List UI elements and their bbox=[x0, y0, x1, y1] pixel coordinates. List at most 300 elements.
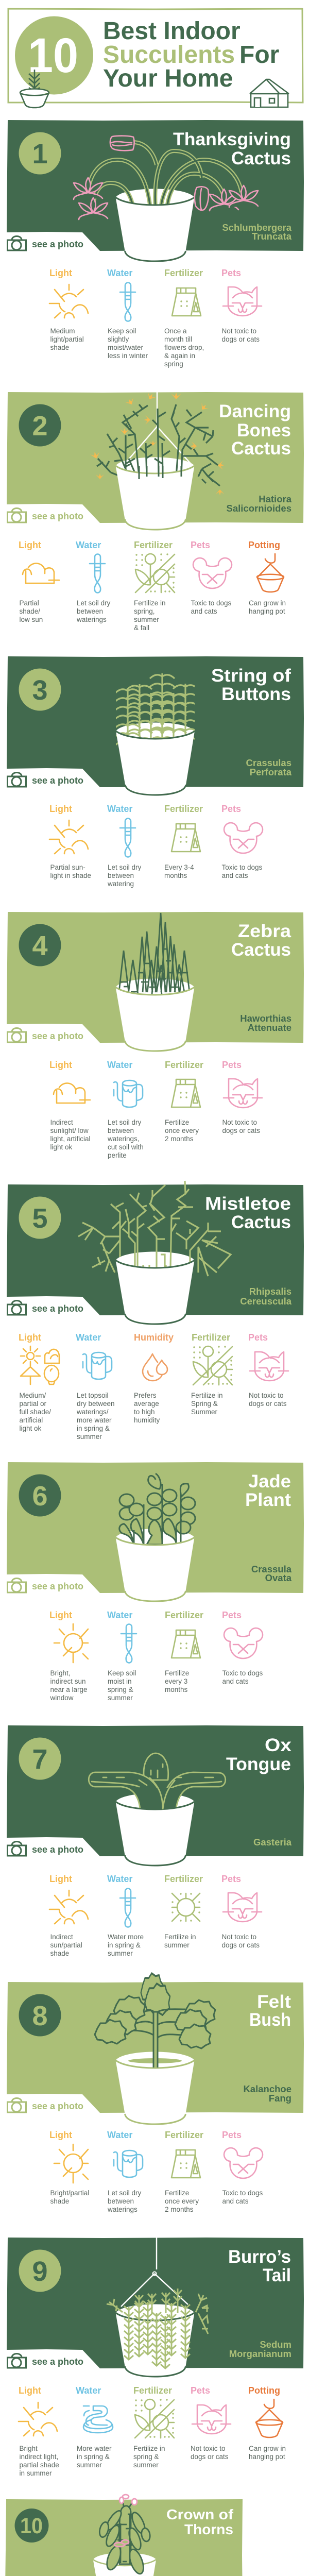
care: fertilizer: Fertilizer bbox=[133, 2385, 172, 2396]
section 7: Ox Tongue bbox=[7, 1725, 304, 1957]
number badge: 1 bbox=[32, 139, 48, 170]
care: light: near a large bbox=[50, 1686, 88, 1693]
title: For bbox=[239, 41, 279, 69]
pot and plant illustration bbox=[95, 1973, 215, 2124]
plant name: Thanksgiving bbox=[173, 129, 291, 149]
section 10: Crown of Thorns bbox=[5, 2495, 243, 2576]
botanical name: Ovata bbox=[265, 1572, 292, 1583]
care: light: sun/partial bbox=[50, 1941, 82, 1949]
see a photo button: see a photo bbox=[32, 239, 83, 249]
see a photo button: see a photo bbox=[32, 511, 83, 521]
care: light bbox=[49, 1060, 91, 1151]
care: pets: Not toxic to bbox=[221, 1933, 256, 1941]
care: light: low sun bbox=[20, 616, 43, 623]
number badge: 5 bbox=[32, 1203, 48, 1234]
plant name: Bones bbox=[237, 420, 291, 440]
care: pets: Pets bbox=[191, 540, 210, 550]
see a photo button bbox=[7, 1300, 83, 1315]
care: fertilizer: Fertilizer bbox=[164, 1874, 203, 1884]
care: pets: Toxic to dogs bbox=[221, 863, 263, 871]
care: light bbox=[19, 1332, 59, 1432]
plant name: Plant bbox=[245, 1490, 291, 1510]
care: light: shade/ bbox=[20, 607, 40, 615]
icon: potted plant bbox=[20, 70, 49, 108]
panel bbox=[7, 1462, 304, 1593]
number badge bbox=[19, 404, 61, 446]
care: water bbox=[107, 2130, 143, 2213]
care: light: Partial sun- bbox=[50, 863, 85, 871]
care: potting: Potting bbox=[248, 540, 280, 550]
care: potting: hanging pot bbox=[249, 2453, 285, 2461]
care: humidity: Prefers bbox=[134, 1392, 157, 1399]
care: fertilizer: every 3 bbox=[165, 1677, 187, 1685]
section 9: Burro's Tail bbox=[7, 2238, 304, 2477]
see a photo button bbox=[7, 1028, 83, 1042]
care: light: Light bbox=[19, 2385, 41, 2396]
care: humidity: average bbox=[134, 1400, 159, 1408]
panel bbox=[7, 912, 304, 1043]
plant name: Ox bbox=[265, 1735, 292, 1755]
care: water: Water bbox=[107, 804, 132, 814]
number badge bbox=[19, 924, 61, 967]
care: fertilizer: Fertilizer bbox=[192, 1332, 230, 1343]
care: pets: Pets bbox=[222, 1610, 242, 1620]
panel bbox=[7, 1725, 304, 1856]
see a photo button: see a photo bbox=[32, 1303, 83, 1314]
care: pets bbox=[222, 1060, 262, 1134]
care: water: moist/water bbox=[108, 344, 144, 351]
care: fertilizer: Fertilizer bbox=[165, 2130, 203, 2140]
care: fertilizer: summer bbox=[134, 616, 159, 623]
care: water: watering bbox=[107, 880, 134, 888]
care: humidity bbox=[134, 1332, 174, 1424]
care: light: indirect light, bbox=[20, 2453, 58, 2461]
care: pets: Not toxic to bbox=[191, 2445, 226, 2452]
care: fertilizer: Fertilizer bbox=[164, 268, 203, 278]
care: water: Keep soil bbox=[108, 327, 136, 335]
care: light: Light bbox=[49, 804, 72, 814]
botanical name: Fang bbox=[269, 2093, 291, 2104]
care: pets: dogs or cats bbox=[221, 1941, 260, 1949]
care: water: waterings/ bbox=[76, 1408, 109, 1416]
care: light: shade bbox=[50, 344, 69, 351]
care: light: artificial bbox=[20, 1416, 43, 1424]
care: light bbox=[49, 1874, 88, 1957]
care: water: More water bbox=[77, 2445, 112, 2452]
plant name: Cactus bbox=[231, 1212, 291, 1232]
care: light: light in shade bbox=[50, 872, 91, 879]
care: fertilizer bbox=[165, 1610, 203, 1693]
care: light: full shade/ bbox=[20, 1408, 51, 1416]
care: fertilizer: Fertilize bbox=[165, 1669, 189, 1677]
care: pets bbox=[191, 540, 232, 615]
care: fertilizer: summer bbox=[133, 2461, 159, 2469]
care: fertilizer: once every bbox=[165, 2197, 199, 2205]
plant name: Felt bbox=[257, 1992, 291, 2012]
care: water bbox=[107, 804, 142, 888]
care: water: perlite bbox=[108, 1151, 127, 1159]
care: water: Water bbox=[107, 1610, 132, 1620]
care: potting: Can grow in bbox=[249, 599, 286, 607]
care: water: waterings, bbox=[107, 1135, 140, 1143]
botanical name: Crassula bbox=[251, 1564, 292, 1574]
number badge: 10 bbox=[20, 2514, 43, 2538]
number badge: 4 bbox=[32, 930, 48, 961]
care: fertilizer: Fertilizer bbox=[165, 1610, 203, 1620]
care: water: waterings bbox=[107, 2206, 138, 2213]
care: water bbox=[107, 1060, 144, 1159]
botanical name: Morganianum bbox=[229, 2348, 291, 2359]
number badge: 3 bbox=[32, 675, 48, 706]
number badge bbox=[14, 2509, 48, 2543]
number badge bbox=[19, 2249, 61, 2292]
care: potting: Potting bbox=[248, 2385, 280, 2396]
care: water: spring & bbox=[108, 1686, 133, 1693]
number badge: 8 bbox=[32, 2001, 48, 2031]
care: water: between bbox=[108, 872, 134, 879]
care: pets: Not toxic to bbox=[249, 1392, 284, 1399]
care: pets: and cats bbox=[222, 2197, 249, 2205]
care: water bbox=[76, 1332, 115, 1440]
header frame bbox=[8, 9, 303, 103]
care: potting bbox=[248, 540, 286, 615]
care: fertilizer bbox=[164, 268, 204, 368]
see a photo button: see a photo bbox=[32, 1581, 83, 1591]
care: light: Bright, bbox=[50, 1669, 71, 1677]
care: fertilizer: Fertilizer bbox=[165, 1060, 203, 1070]
care: pets: Pets bbox=[222, 2130, 242, 2140]
care: pets: dogs or cats bbox=[222, 1127, 260, 1134]
care: light: indirect sun bbox=[50, 1677, 86, 1685]
botanical name: Kalanchoe bbox=[243, 2083, 291, 2094]
care: pets: Pets bbox=[191, 2385, 210, 2396]
care: water: Water bbox=[107, 2130, 132, 2140]
panel bbox=[7, 656, 304, 787]
care: light: Light bbox=[49, 2130, 72, 2140]
care: potting: Can grow in bbox=[249, 2445, 286, 2452]
care: fertilizer: 2 months bbox=[165, 2206, 194, 2213]
section 2: Dancing Bones Cactus bbox=[7, 392, 304, 632]
care: light: Indirect bbox=[50, 1118, 73, 1126]
care: water bbox=[107, 1874, 144, 1957]
see a photo button: see a photo bbox=[32, 2357, 83, 2367]
care: water: Water more bbox=[108, 1933, 144, 1941]
care: fertilizer bbox=[165, 2130, 203, 2213]
botanical name: Attenuate bbox=[248, 1022, 291, 1033]
care: light bbox=[49, 1610, 88, 1702]
care: light: light/partial bbox=[50, 335, 84, 343]
care: pets bbox=[248, 1332, 288, 1408]
care: water: Water bbox=[107, 1874, 132, 1884]
care: water: Let soil dry bbox=[77, 599, 111, 607]
title: Best Indoor bbox=[103, 18, 241, 45]
care: light: Bright/partial bbox=[50, 2189, 89, 2197]
care: fertilizer: flowers drop, bbox=[164, 344, 204, 351]
care: water: cut soil with bbox=[108, 1143, 144, 1151]
care: pets bbox=[191, 2385, 231, 2461]
see a photo button: see a photo bbox=[32, 1844, 83, 1855]
number badge bbox=[19, 1196, 61, 1239]
number badge bbox=[19, 1994, 61, 2036]
plant name: Cactus bbox=[231, 148, 291, 168]
care: water: Let topsoil bbox=[77, 1392, 109, 1399]
care: light: window bbox=[49, 1694, 74, 1702]
see a photo button: see a photo bbox=[32, 775, 83, 786]
care: light bbox=[19, 540, 59, 623]
see a photo button: see a photo bbox=[32, 2101, 83, 2111]
plant name: Jade bbox=[248, 1471, 291, 1492]
section 3: String of Buttons bbox=[7, 656, 304, 888]
plant name: Tongue bbox=[226, 1754, 291, 1774]
care: fertilizer: Every 3-4 bbox=[164, 863, 194, 871]
pot and plant illustration bbox=[89, 1753, 226, 1866]
care: water: summer bbox=[77, 2461, 102, 2469]
botanical name: Haworthias bbox=[240, 1013, 291, 1024]
care: light: light ok bbox=[20, 1425, 42, 1432]
see a photo button bbox=[7, 1841, 83, 1856]
care: fertilizer: Fertilize in bbox=[133, 2445, 165, 2452]
care: fertilizer: Fertilize bbox=[165, 1118, 189, 1126]
care: light: partial shade bbox=[20, 2461, 59, 2469]
care: fertilizer: months bbox=[164, 872, 187, 879]
care: humidity: Humidity bbox=[134, 1332, 174, 1343]
care: water: in spring & bbox=[77, 1425, 110, 1432]
care: water: Water bbox=[76, 1332, 101, 1343]
care: water: more water bbox=[77, 1416, 112, 1424]
icon: house bbox=[250, 79, 289, 107]
plant name: Cactus bbox=[231, 438, 291, 459]
title: Your Home bbox=[103, 65, 233, 92]
number badge bbox=[19, 1475, 61, 1517]
care: light: partial or bbox=[20, 1400, 47, 1408]
number badge: 7 bbox=[32, 1744, 48, 1775]
care: fertilizer: month till bbox=[164, 335, 192, 343]
care: pets bbox=[221, 804, 263, 879]
plant name: Dancing bbox=[219, 401, 291, 421]
care: fertilizer: spring & bbox=[133, 2453, 159, 2461]
care: water: Let soil dry bbox=[108, 1118, 142, 1126]
botanical name: Sedum bbox=[260, 2339, 291, 2350]
care: water: summer bbox=[77, 1433, 102, 1440]
number badge bbox=[19, 1737, 61, 1780]
care: water: Let soil dry bbox=[108, 863, 142, 871]
plant name: Crown of bbox=[166, 2506, 234, 2522]
care: pets: Pets bbox=[221, 268, 241, 278]
see a photo button bbox=[7, 1579, 83, 1592]
care: fertilizer bbox=[164, 1874, 203, 1949]
care: light: Light bbox=[49, 268, 72, 278]
care: pets: and cats bbox=[222, 1677, 249, 1685]
care: light: shade bbox=[50, 1950, 69, 1957]
care: fertilizer: & again in bbox=[164, 352, 195, 360]
number badge: 6 bbox=[32, 1481, 48, 1512]
care: water: Water bbox=[76, 540, 101, 550]
care: fertilizer bbox=[164, 804, 203, 879]
see a photo button bbox=[7, 773, 83, 787]
header banner bbox=[8, 9, 303, 108]
care: pets: Not toxic to bbox=[222, 1118, 257, 1126]
care: light: Light bbox=[49, 1610, 72, 1620]
care: pets: Pets bbox=[221, 1874, 241, 1884]
panel bbox=[5, 2499, 243, 2576]
care: pets: and cats bbox=[191, 607, 217, 615]
care: fertilizer: Fertilize bbox=[165, 2189, 189, 2197]
care: pets: dogs or cats bbox=[191, 2453, 229, 2461]
care: water: Water bbox=[107, 268, 132, 278]
pot and plant illustration bbox=[74, 136, 258, 261]
care: pets: Pets bbox=[248, 1332, 268, 1343]
big number 10: 10 bbox=[28, 28, 78, 83]
care: fertilizer: Fertilizer bbox=[134, 540, 173, 550]
care: water: Let soil dry bbox=[108, 2189, 142, 2197]
care: light: Partial bbox=[20, 599, 39, 607]
pot and plant illustration bbox=[115, 673, 198, 795]
care: pets: Toxic to dogs bbox=[191, 599, 232, 607]
care: pets bbox=[221, 268, 262, 343]
see a photo button bbox=[7, 2098, 83, 2112]
see a photo button bbox=[7, 236, 83, 250]
section 5: Mistletoe Cactus bbox=[7, 1181, 304, 1440]
care: light: Light bbox=[19, 1332, 41, 1343]
care: pets: Not toxic to bbox=[221, 327, 256, 335]
panel bbox=[7, 2238, 304, 2368]
see a photo button bbox=[7, 2353, 83, 2368]
care: fertilizer bbox=[133, 2385, 174, 2469]
care: humidity: humidity bbox=[134, 1416, 160, 1424]
number badge: 9 bbox=[32, 2256, 48, 2287]
botanical name: Schlumbergera bbox=[222, 222, 292, 233]
pot and plant illustration bbox=[107, 2238, 209, 2377]
care: water: dry between bbox=[77, 1400, 115, 1408]
care: pets: Toxic to dogs bbox=[222, 2189, 263, 2197]
care: fertilizer: spring, bbox=[134, 607, 155, 615]
care: fertilizer: Summer bbox=[191, 1408, 218, 1416]
care: pets: Pets bbox=[221, 804, 241, 814]
care: water bbox=[107, 268, 148, 360]
care: light: shade bbox=[50, 2197, 69, 2205]
care: fertilizer: Fertilize in bbox=[134, 599, 166, 607]
care: humidity: to high bbox=[134, 1408, 155, 1416]
botanical name: Salicornioides bbox=[227, 503, 291, 514]
care: water: in spring & bbox=[77, 2453, 110, 2461]
care: pets bbox=[222, 2130, 263, 2205]
see a photo button: see a photo bbox=[32, 1031, 83, 1041]
care: light: light ok bbox=[50, 1143, 73, 1151]
care: light bbox=[49, 804, 91, 879]
care: fertilizer: Fertilize in bbox=[164, 1933, 196, 1941]
plant name: Tail bbox=[263, 2265, 291, 2285]
section 6: Jade Plant bbox=[7, 1462, 304, 1702]
care: water bbox=[107, 1610, 136, 1702]
care: fertilizer: 2 months bbox=[165, 1135, 194, 1143]
care: water: between bbox=[108, 2197, 134, 2205]
botanical name: Gasteria bbox=[253, 1837, 292, 1848]
care: fertilizer: Fertilize in bbox=[191, 1392, 223, 1399]
care: light: Light bbox=[49, 1874, 72, 1884]
care: fertilizer: Fertilizer bbox=[164, 804, 203, 814]
plant name: Thorns bbox=[184, 2521, 233, 2537]
botanical name: Crassulas bbox=[246, 757, 291, 768]
pot and plant illustration bbox=[93, 2495, 156, 2576]
care: light: Medium bbox=[50, 327, 75, 335]
panel bbox=[7, 1982, 304, 2113]
care: water: slightly bbox=[108, 335, 129, 343]
plant name: Bush bbox=[249, 2010, 291, 2030]
care: water: in spring & bbox=[108, 1941, 141, 1949]
care: light: Bright bbox=[20, 2445, 38, 2452]
care: light bbox=[49, 2130, 89, 2205]
botanical name: Cereuscula bbox=[240, 1296, 292, 1307]
care: fertilizer: summer bbox=[164, 1941, 190, 1949]
care: light: Indirect bbox=[50, 1933, 73, 1941]
care: water: Water bbox=[76, 2385, 101, 2396]
see a photo button bbox=[7, 508, 83, 522]
number badge bbox=[19, 132, 61, 174]
care: light: sunlight/ low bbox=[50, 1127, 89, 1134]
care: water: less in winter bbox=[108, 352, 148, 360]
care: fertilizer bbox=[191, 1332, 232, 1416]
title: Succulents bbox=[103, 41, 235, 69]
care: water: moist in bbox=[108, 1677, 132, 1685]
plant name: String of bbox=[211, 666, 291, 686]
botanical name: Truncata bbox=[252, 231, 292, 242]
panel bbox=[7, 1184, 304, 1315]
care: water: between bbox=[77, 607, 103, 615]
section 8: Felt Bush bbox=[7, 1973, 304, 2213]
section 4: Zebra Cactus bbox=[7, 912, 304, 1159]
plant name: Cactus bbox=[231, 940, 291, 960]
botanical name: Rhipsalis bbox=[249, 1286, 291, 1297]
care: light bbox=[49, 268, 88, 351]
care: light: Light bbox=[49, 1060, 72, 1070]
care: potting: hanging pot bbox=[249, 607, 285, 615]
number badge bbox=[19, 669, 61, 711]
care: water: Keep soil bbox=[108, 1669, 136, 1677]
care: fertilizer: spring bbox=[164, 360, 183, 368]
panel bbox=[7, 392, 304, 523]
care: fertilizer: once every bbox=[165, 1127, 199, 1134]
care: water bbox=[76, 540, 111, 623]
care: pets: Pets bbox=[222, 1060, 242, 1070]
panel bbox=[7, 120, 304, 251]
number badge: 2 bbox=[32, 411, 48, 442]
pot and plant illustration bbox=[115, 913, 195, 1051]
care: fertilizer bbox=[165, 1060, 203, 1143]
care: fertilizer bbox=[134, 540, 175, 632]
pot and plant illustration bbox=[115, 1473, 195, 1601]
care: pets bbox=[222, 1610, 263, 1685]
plant name: Zebra bbox=[238, 921, 291, 941]
care: fertilizer: months bbox=[165, 1686, 188, 1693]
plant name: Burro’s bbox=[228, 2247, 291, 2267]
care: fertilizer: & fall bbox=[134, 624, 149, 632]
section 1: Thanksgiving Cactus bbox=[7, 120, 304, 368]
care: pets bbox=[221, 1874, 262, 1949]
care: pets: dogs or cats bbox=[249, 1400, 287, 1408]
care: pets: Toxic to dogs bbox=[222, 1669, 263, 1677]
pot and plant illustration bbox=[78, 1181, 231, 1324]
plant name: Mistletoe bbox=[205, 1194, 291, 1214]
care: light: light, artificial bbox=[50, 1135, 91, 1143]
care: light bbox=[19, 2385, 59, 2477]
care: fertilizer: Once a bbox=[164, 327, 187, 335]
care: fertilizer: Spring & bbox=[191, 1400, 218, 1408]
care: water: summer bbox=[108, 1950, 133, 1957]
care: light: in summer bbox=[20, 2469, 52, 2477]
care: water: between bbox=[108, 1127, 134, 1134]
care: light: Light bbox=[19, 540, 41, 550]
care: light: Medium/ bbox=[20, 1392, 46, 1399]
